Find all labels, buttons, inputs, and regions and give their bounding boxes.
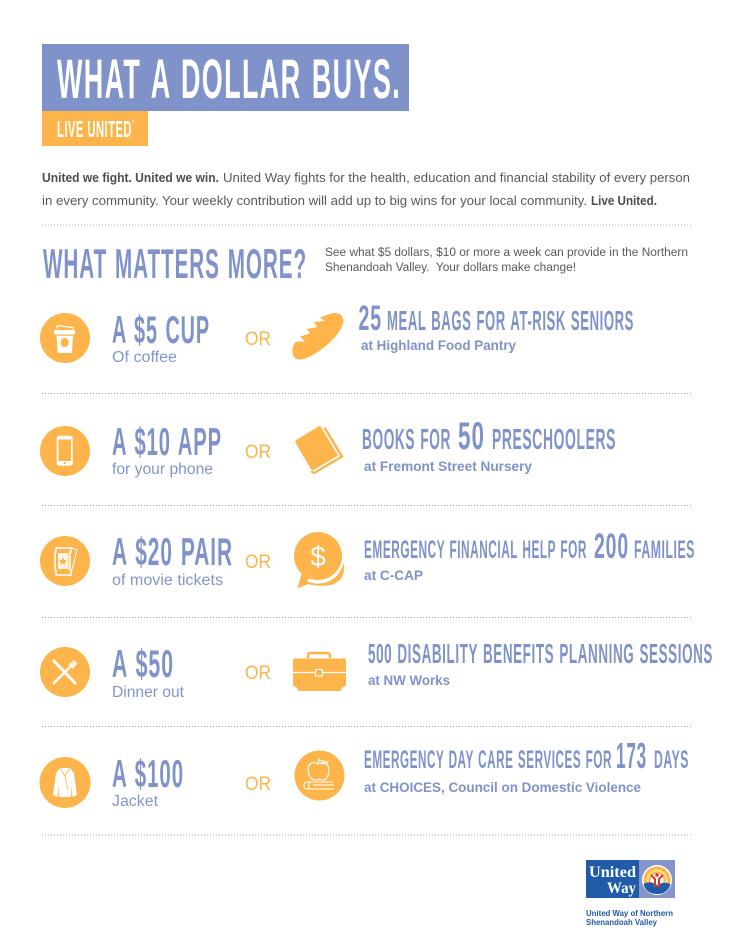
item: dinner: A $50	[112, 643, 174, 686]
live united tag: LIVE UNITED	[57, 116, 132, 142]
impact: books: at Fremont Street Nursery	[364, 458, 532, 474]
row 5	[40, 735, 689, 810]
item: movie tickets	[112, 531, 233, 589]
item: app: A $10 APP	[112, 421, 222, 464]
intro text: United we fight. United we win.	[42, 170, 219, 185]
icon: bread	[292, 313, 343, 360]
live united tag: ®	[132, 119, 135, 124]
impact: meal bags: 25	[358, 299, 382, 338]
item: movie tickets: A $20 PAIR	[112, 531, 233, 574]
infographic: WHAT MATTERS MORE?	[43, 240, 307, 287]
item: jacket	[112, 753, 184, 810]
icon: movie tickets	[40, 536, 90, 586]
impact: day care: at CHOICES, Council on Domestic Violence	[364, 779, 641, 795]
icon: speech bubble dollar	[294, 532, 344, 588]
icon: jacket	[40, 757, 90, 808]
row 3	[40, 527, 695, 589]
logo: united way: United	[589, 864, 636, 881]
heading note: Shenandoah Valley. Your dollars make change!	[325, 262, 576, 274]
icon: book	[295, 426, 342, 473]
live united tag	[42, 111, 148, 146]
impact: books	[362, 415, 616, 474]
item: movie tickets: of movie tickets	[112, 572, 223, 589]
impact: meal bags	[358, 299, 634, 353]
icon: phone	[40, 426, 90, 476]
intro text: Live United.	[591, 193, 657, 208]
logo caption	[586, 909, 673, 927]
row 1	[40, 299, 634, 366]
logo: united way	[586, 860, 675, 898]
row 2	[40, 415, 616, 478]
impact: disability planning: at NW Works	[368, 672, 450, 688]
item: app: for your phone	[112, 461, 213, 478]
intro text: in every community. Your weekly contribution will add up to big wins for your local community.	[42, 193, 587, 208]
or: OR	[245, 441, 271, 463]
impact: meal bags: at Highland Food Pantry	[361, 337, 516, 353]
infographic: DAYS	[654, 746, 689, 774]
heading note	[325, 247, 688, 274]
icon: apple on books	[294, 750, 344, 800]
logo caption: Shenandoah Valley	[586, 918, 658, 927]
heading note: See what $5 dollars, $10 or more a week can provide in the Northern	[325, 247, 688, 259]
item: jacket: Jacket	[112, 793, 159, 810]
intro text: United Way fights for the health, education and financial stability of every person	[223, 170, 690, 185]
icon: coffee cup	[40, 313, 90, 363]
logo emblem	[642, 865, 672, 895]
item: dinner	[112, 643, 185, 701]
logo caption: United Way of Northern	[586, 909, 673, 918]
item: coffee: Of coffee	[112, 349, 177, 366]
or: OR	[245, 662, 271, 684]
impact: financial help: 200	[594, 527, 629, 566]
or: OR	[245, 551, 271, 573]
impact: day care: 173	[616, 735, 647, 776]
item: coffee	[112, 309, 210, 366]
icon: briefcase	[293, 653, 346, 691]
impact: disability planning	[368, 638, 713, 688]
impact: books: BOOKS FOR	[362, 424, 451, 456]
impact: books: 50	[458, 415, 485, 458]
impact: financial help	[364, 527, 695, 583]
title banner	[42, 44, 409, 111]
item: dinner: Dinner out	[112, 684, 185, 701]
item: jacket: A $100	[112, 753, 184, 796]
item: coffee: A $5 CUP	[112, 309, 210, 352]
or: OR	[245, 328, 271, 350]
icon: fork and knife	[40, 647, 90, 697]
impact: day care	[364, 735, 689, 795]
icon: speech bubble dollar: $	[310, 541, 326, 572]
or: OR	[245, 773, 271, 795]
logo: united way: Way	[607, 880, 636, 897]
row 4	[40, 638, 713, 701]
item: app	[112, 421, 222, 478]
intro text	[42, 170, 690, 208]
impact: financial help: at C-CAP	[364, 567, 423, 583]
